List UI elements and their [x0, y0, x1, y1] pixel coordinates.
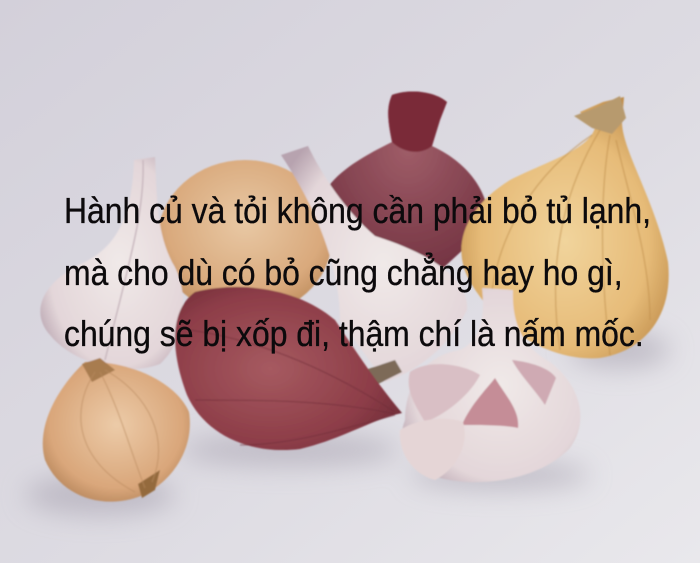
small tan onion — [43, 362, 190, 502]
yellow onion right — [461, 97, 669, 358]
front garlic — [402, 288, 580, 482]
centre garlic — [281, 146, 467, 382]
tan onion behind — [158, 160, 332, 316]
caption line 1: Hành củ và tỏi không cần phải bỏ tủ lạnh, — [64, 190, 651, 231]
red onion front — [175, 287, 402, 450]
caption line 2: mà cho dù có bỏ cũng chẳng hay ho gì, — [64, 252, 623, 293]
shadows under the bulbs — [25, 332, 670, 515]
caption line 3: chúng sẽ bị xốp đi, thậm chí là nấm mốc. — [64, 313, 644, 354]
red onion back — [326, 91, 490, 280]
left garlic — [40, 157, 183, 369]
